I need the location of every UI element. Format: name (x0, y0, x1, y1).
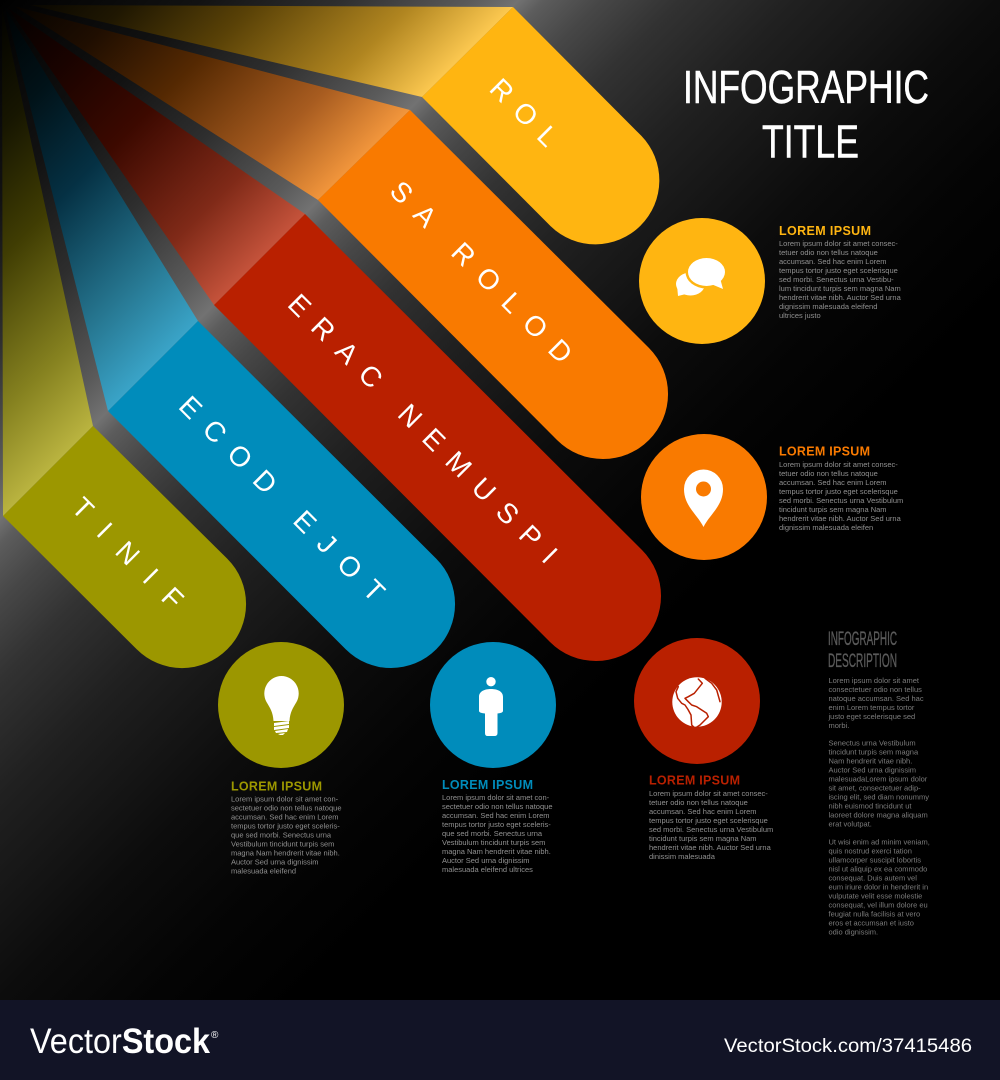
panel: olive fan shadow (2, 8, 93, 516)
text block: blue: LOREM IPSUM (442, 778, 533, 792)
text block: description: consequat, vel illum dolore eu (828, 900, 928, 910)
text block: orange: tetuer odio non tellus natoque (779, 469, 878, 478)
label: ECOD EJOT: ECOD EJOT (173, 390, 401, 618)
text block: description: laoreet dolore magna aliquam (828, 810, 928, 820)
text block: orange: dignissim malesuada eleifen (779, 523, 873, 532)
text block: description: feugiat nulla facilisis at vero (828, 910, 920, 918)
text block: red: sed morbi. Senectus urna Vestibulum (649, 825, 773, 834)
panel: yellow fan shadow (30, 5, 513, 97)
icon: globe (634, 638, 760, 764)
text block: orange: Lorem ipsum dolor sit amet consec- (779, 460, 898, 469)
text block: orange (779, 444, 903, 532)
text block: red: LOREM IPSUM (649, 774, 740, 788)
text block: olive: accumsan. Sed hac enim Lorem (231, 812, 339, 822)
text block: olive: que sed morbi. Senectus urna (231, 830, 332, 840)
text block: yellow: lum tincidunt turpis sem magna Nam (779, 284, 901, 293)
icon: light bulb (218, 642, 344, 768)
text block: description: eros et accumsan et iusto (828, 918, 914, 928)
text block: description: sit amet, consectetuer adip- (828, 784, 921, 792)
text block: blue: malesuada eleifend ultrices (442, 865, 533, 874)
text block: description: Auctor Sed urna dignissim (828, 766, 916, 774)
text block: description: consequat. Duis autem vel (828, 874, 917, 882)
text block: description: vulputate velit esse molestie (828, 892, 922, 900)
text block: description: nibh euismod tincidunt ut (828, 802, 912, 810)
text block: yellow: Lorem ipsum dolor sit amet consec- (779, 239, 898, 248)
heading: infographic description (828, 629, 897, 672)
text block: orange: accumsan. Sed hac enim Lorem (779, 478, 887, 487)
text block: yellow: hendrerit vitae nibh. Auctor Sed urna (779, 293, 902, 302)
text block: yellow: accumsan. Sed hac enim Lorem (779, 257, 887, 266)
text block: description: quis nostrud exerci tation (828, 846, 912, 856)
text block: olive: tempus tortor justo eget sceleris- (231, 822, 340, 830)
text block: description: Nam hendrerit vitae nibh. (828, 756, 912, 766)
text block: description: Senectus urna Vestibulum (828, 738, 916, 748)
text block: orange: LOREM IPSUM (779, 444, 870, 458)
text block: olive: Auctor Sed urna dignissim (231, 858, 319, 866)
text block: olive (231, 780, 342, 876)
label: ROL: ROL (484, 72, 573, 161)
text block: description: justo eget scelerisque sed (828, 712, 915, 721)
footer registered mark: ® (211, 1030, 219, 1041)
text block: description: Lorem ipsum dolor sit amet (828, 676, 920, 685)
text block: red: hendrerit vitae nibh. Auctor Sed urna (649, 843, 772, 852)
text block: blue: Auctor Sed urna dignissim (442, 856, 530, 865)
text block: red: dinissim malesuada (649, 852, 716, 861)
text block: description: enim Lorem tempus tortor (828, 703, 915, 712)
text block: orange: hendrerit vitae nibh. Auctor Sed urna (779, 514, 902, 523)
text block: yellow: tetuer odio non tellus natoque (779, 248, 878, 257)
panel: olive band (3, 426, 246, 668)
footer url: VectorStock.com/37415486 (724, 1036, 972, 1057)
text block: yellow: ultrices justo (779, 311, 821, 320)
text block: blue: que sed morbi. Senectus urna (442, 829, 543, 838)
text block: description: erat volutpat. (828, 820, 872, 828)
text block: blue: magna Nam hendrerit vitae nibh. (442, 847, 551, 856)
heading: infographic description: INFOGRAPHIC (828, 629, 897, 650)
text block: blue: Vestibulum tincidunt turpis sem (442, 838, 545, 847)
text block: blue: sectetuer odio non tellus natoque (442, 802, 552, 811)
text block: blue: Lorem ipsum dolor sit amet con- (442, 793, 550, 802)
text block: description: eum iriure dolor in hendrerit in (828, 882, 928, 892)
icon: person (430, 642, 556, 768)
text block: yellow: LOREM IPSUM (779, 224, 871, 238)
text block: description: odio dignissim. (828, 928, 878, 936)
heading: infographic description: DESCRIPTION (828, 651, 897, 672)
panel: blue band (108, 321, 455, 668)
text block: description: consectetuer odio non tellus (828, 685, 922, 694)
text block: orange: sed morbi. Senectus urna Vestibulum (779, 496, 903, 505)
text block: description: malesuadaLorem ipsum dolor (828, 774, 928, 784)
panel: red fan shadow (8, 8, 305, 305)
text block: yellow: sed morbi. Senectus urna Vestibu- (779, 275, 894, 284)
icon: chat bubbles (639, 218, 765, 344)
label: ERAC NEMUSPI: ERAC NEMUSPI (282, 288, 573, 579)
text block: blue (442, 778, 552, 874)
panel: red band (214, 214, 661, 661)
text block: olive: Vestibulum tincidunt turpis sem (231, 840, 334, 848)
panel: orange fan shadow (14, 6, 410, 200)
text block: red: Lorem ipsum dolor sit amet consec- (649, 789, 768, 798)
text block: description: ullamcorper suscipit lobortis (828, 856, 921, 864)
text block: yellow (779, 224, 902, 320)
text block: yellow: dignissim malesuada eleifend (779, 302, 877, 311)
title (683, 61, 929, 168)
text block: orange: tempus tortor justo eget scelerisque (779, 487, 898, 496)
text block: olive: sectetuer odio non tellus natoque (231, 804, 342, 812)
footer bar (0, 1000, 1000, 1080)
text block: olive: Lorem ipsum dolor sit amet con- (231, 794, 339, 804)
text block: description: morbi. (828, 721, 849, 730)
text block: red (649, 774, 773, 861)
footer logo: VectorStock (30, 1022, 210, 1061)
text block: red: tempus tortor justo eget scelerisque (649, 816, 768, 825)
text block: description: natoque accumsan. Sed hac (828, 694, 924, 703)
text block: blue: tempus tortor justo eget sceleris- (442, 820, 551, 829)
text block: orange: tincidunt turpis sem magna Nam (779, 505, 887, 514)
icon: map pin (641, 434, 767, 560)
title: INFOGRAPHIC (683, 61, 929, 113)
text block: blue: accumsan. Sed hac enim Lorem (442, 811, 550, 820)
text block: olive: malesuada eleifend (231, 866, 296, 876)
text block: description: tincidunt turpis sem magna (828, 748, 919, 756)
title: TITLE (762, 116, 859, 168)
text block: red: tincidunt turpis sem magna Nam (649, 834, 757, 843)
text block: description: nisl ut aliquip ex ea commodo (828, 864, 927, 874)
text block: olive: LOREM IPSUM (231, 780, 322, 794)
text block: olive: magna Nam hendrerit vitae nibh. (231, 848, 340, 858)
panel: orange band (318, 110, 668, 459)
text block: red: tetuer odio non tellus natoque (649, 798, 748, 807)
panel: yellow band (422, 7, 659, 244)
text block: red: accumsan. Sed hac enim Lorem (649, 807, 757, 816)
label: SA ROLOD: SA ROLOD (384, 175, 589, 379)
label: TINIF: TINIF (66, 491, 203, 628)
panel: blue fan shadow (5, 8, 198, 411)
text block: description: iscing elit, sed diam nonummy (828, 792, 929, 802)
text block: yellow: tempus tortor justo eget scelerisque (779, 266, 898, 275)
text block: description: Ut wisi enim ad minim veniam, (828, 838, 930, 846)
